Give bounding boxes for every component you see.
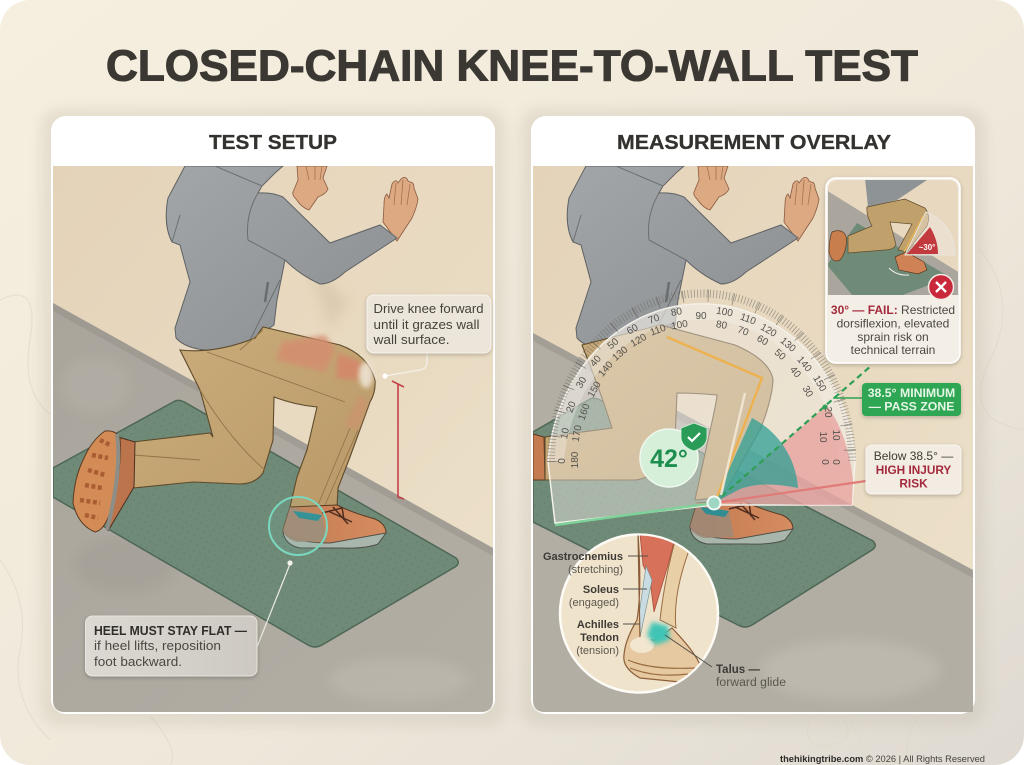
protractor scale numbers: 40 (787, 365, 803, 381)
red fail wedge (714, 405, 853, 505)
illustration: kneeling lunge at wall (53, 166, 493, 712)
pivot point (708, 496, 720, 510)
callout: heel must stay flat: HEEL MUST STAY FLAT — (94, 624, 247, 638)
anatomy labels: Gastrocnemius (543, 551, 623, 563)
anatomy labels: (tension) (576, 645, 619, 657)
protractor scale numbers: 120 (629, 332, 649, 350)
protractor scale numbers: 10 (830, 429, 841, 441)
anatomy labels (543, 551, 623, 657)
anatomy labels: Achilles (577, 619, 619, 631)
heel highlight ring (269, 497, 327, 555)
protractor scale numbers: 50 (606, 336, 622, 352)
talus label (716, 664, 786, 689)
protractor scale numbers: 60 (625, 322, 641, 337)
protractor scale numbers: 50 (772, 347, 788, 363)
icon: back shoe (533, 434, 545, 480)
protractor scale numbers: 20 (822, 406, 833, 418)
callout: high injury risk: HIGH INJURY (876, 463, 951, 477)
protractor scale numbers: 150 (810, 374, 828, 394)
protractor scale numbers: 170 (571, 424, 584, 443)
measurement lines (555, 337, 872, 525)
talus label: Talus — (716, 664, 760, 676)
protractor scale numbers: 0 (830, 459, 841, 465)
protractor scale numbers: 0 (819, 459, 830, 465)
protractor scale numbers: 80 (715, 319, 728, 332)
callout: high injury risk (866, 445, 961, 494)
anatomy magnifier circle (543, 534, 786, 692)
ankle anatomy drawing (624, 534, 700, 682)
anatomy leaders (623, 556, 712, 667)
protractor scale numbers: 110 (738, 312, 758, 328)
callout: heel must stay flat leader (257, 564, 290, 647)
protractor scale numbers: 80 (670, 306, 683, 319)
callout: drive knee forward: wall surface. (372, 332, 450, 347)
angle badge 42 degrees: 42° (650, 445, 688, 473)
anatomy labels: (engaged) (569, 597, 619, 609)
protractor scale numbers: 130 (610, 344, 631, 364)
icon: red x fail (928, 274, 954, 300)
inset: 30 degree fail example (826, 178, 960, 363)
teal pass wedge (714, 418, 798, 503)
protractor scale numbers: 30 (800, 384, 815, 400)
protractor scale numbers: 120 (758, 322, 779, 340)
footer credit: thehikingtribe.com © 2026 | All Rights Reserved (780, 754, 985, 765)
callout: pass zone: — PASS ZONE (869, 400, 954, 414)
callout: drive knee forward (367, 295, 491, 353)
protractor (548, 293, 855, 523)
callout: high injury risk: RISK (899, 476, 928, 490)
protractor scale numbers: 10 (559, 427, 572, 440)
inset illustration: ~30° (919, 243, 935, 252)
anatomy labels: Soleus (583, 584, 619, 596)
protractor scale numbers: 90 (695, 311, 707, 322)
callout: drive knee forward: Drive knee forward (374, 301, 484, 316)
fail description: technical terrain (851, 343, 935, 357)
protractor scale numbers: 180 (570, 451, 581, 468)
icon: green check shield (681, 423, 707, 451)
talus label: forward glide (716, 677, 786, 689)
protractor scale numbers: 70 (647, 312, 662, 327)
protractor scale numbers: 150 (586, 379, 604, 400)
protractor scale numbers: 40 (588, 353, 604, 369)
protractor scale numbers: 140 (794, 354, 814, 375)
protractor scale numbers: 70 (736, 325, 750, 339)
heading: test setup: TEST SETUP (209, 131, 337, 154)
protractor scale numbers (557, 306, 841, 468)
callout: drive knee leader (385, 352, 427, 376)
protractor scale numbers: 100 (670, 319, 689, 332)
protractor scale numbers: 100 (715, 306, 734, 319)
icon: front hiking shoe (283, 505, 386, 548)
panel: measurement overlay (520, 108, 986, 726)
anatomy labels: Tendon (580, 632, 619, 644)
fail description: 30° — FAIL: Restricted (831, 303, 955, 317)
heading: measurement overlay: MEASUREMENT OVERLAY (617, 131, 891, 154)
angle badge 42 degrees (640, 423, 707, 487)
protractor scale numbers: 10 (817, 431, 828, 443)
red wall reference line (392, 381, 404, 499)
callout: heel must stay flat: if heel lifts, reposition (94, 638, 221, 653)
callout: high injury risk: Below 38.5° — (874, 449, 953, 463)
title: CLOSED-CHAIN KNEE-TO-WALL TEST (106, 42, 918, 90)
fail description: dorsiflexion, elevated (837, 316, 949, 330)
icon: back shoe sole (73, 431, 135, 532)
callout: drive knee forward: until it grazes wall (374, 317, 480, 332)
protractor scale numbers: 130 (778, 336, 798, 355)
protractor scale numbers: 0 (557, 458, 568, 464)
protractor scale numbers: 20 (565, 400, 579, 414)
panel: test setup (40, 108, 506, 726)
protractor scale numbers: 110 (649, 323, 668, 339)
protractor scale numbers: 160 (577, 402, 593, 422)
illustration: lunge with overlay (533, 166, 973, 712)
callout: pass zone: 38.5° MINIMUM (868, 386, 955, 400)
icon: front shoe (690, 501, 793, 544)
protractor scale numbers: 30 (574, 375, 590, 390)
callout: heel must stay flat (86, 616, 257, 676)
fail description: sprain risk on (857, 330, 929, 344)
callout: heel must stay flat: foot backward. (94, 654, 182, 669)
anatomy labels: (stretching) (568, 564, 623, 576)
protractor scale numbers: 60 (755, 333, 770, 349)
callout: pass zone (862, 383, 961, 416)
inset illustration (826, 178, 960, 296)
protractor scale numbers: 140 (597, 359, 616, 379)
